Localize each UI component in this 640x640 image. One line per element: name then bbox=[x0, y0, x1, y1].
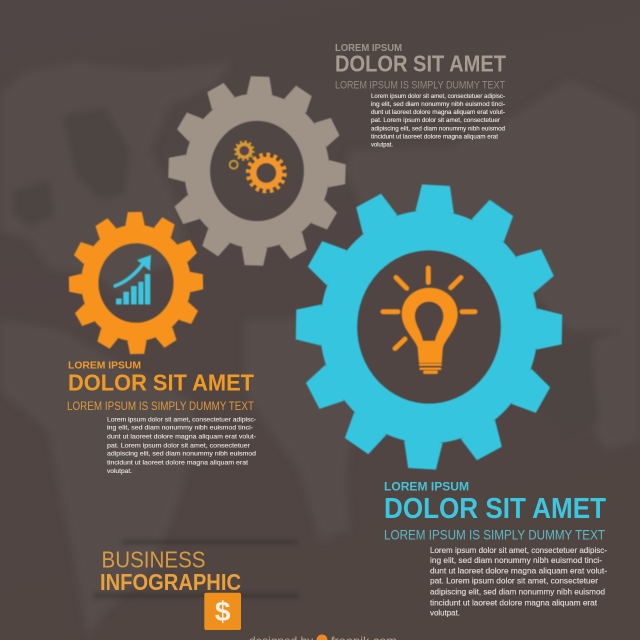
text block: orange: pat. Lorem ipsum dolor sit amet, consectetuer bbox=[107, 442, 251, 449]
text block: orange: LOREM IPSUM IS SIMPLY DUMMY TEXT bbox=[67, 401, 254, 413]
text block: blue: ing elit, sed diam nonummy nibh euismod tinci- bbox=[430, 556, 602, 565]
text block: orange: tincidunt ut laoreet dolore magna aliquam erat bbox=[107, 460, 248, 467]
text block: orange: dunt ut laoreet dolore magna aliquam erat volut- bbox=[107, 433, 256, 440]
text block: orange: DOLOR SIT AMET bbox=[68, 370, 254, 396]
icon: light bulb bbox=[383, 268, 475, 374]
gear: brown bbox=[168, 76, 346, 266]
shadow streaks bbox=[94, 540, 299, 598]
text block: blue bbox=[384, 480, 607, 617]
text block: blue: adipiscing elit, sed diam nonummy nibh euismod bbox=[430, 588, 605, 597]
text block: blue: Lorem ipsum dolor sit amet, consectetuer adipisc- bbox=[430, 546, 607, 555]
icon: dollar badge: $ bbox=[215, 596, 231, 627]
text block: orange: adipiscing elit, sed diam nonummy nibh euismod bbox=[107, 451, 256, 458]
text block: top: volutpat. bbox=[371, 141, 393, 148]
text block: top: pat. Lorem ipsum dolor sit amet, consectetuer bbox=[371, 117, 501, 124]
text block: top: adipiscing elit, sed diam nonummy nibh euismod bbox=[371, 125, 505, 132]
text block: top: ing elit, sed diam nonummy nibh euismod tinci- bbox=[371, 101, 505, 108]
text block: blue: tincidunt ut laoreet dolore magna aliquam erat bbox=[430, 598, 598, 607]
text block: orange: Lorem ipsum dolor sit amet, consectetuer adipisc- bbox=[107, 416, 256, 423]
text block: orange: LOREM IPSUM bbox=[68, 360, 141, 372]
text block: orange: ing elit, sed diam nonummy nibh euismod tinci- bbox=[107, 425, 253, 432]
text block: orange: volutpat. bbox=[107, 468, 132, 475]
icon: small gears bbox=[230, 142, 284, 191]
text block: top: DOLOR SIT AMET bbox=[335, 50, 506, 76]
text block: blue: pat. Lorem ipsum dolor sit amet, consectetuer bbox=[430, 577, 598, 586]
text block: top bbox=[335, 43, 506, 148]
text block: blue: DOLOR SIT AMET bbox=[384, 493, 606, 525]
text block: top: tincidunt ut laoreet dolore magna aliquam erat bbox=[371, 133, 498, 140]
gear: blue bbox=[296, 184, 562, 470]
gear: orange bbox=[69, 212, 203, 354]
text block: top: Lorem ipsum dolor sit amet, consectetuer adipisc- bbox=[371, 93, 505, 100]
text block: top: dunt ut laoreet dolore magna aliquam erat volut- bbox=[371, 109, 505, 116]
text block: blue: dunt ut laoreet dolore magna aliquam erat volut- bbox=[430, 566, 607, 575]
text block: orange bbox=[67, 360, 256, 475]
title: business infographic: INFOGRAPHIC bbox=[100, 569, 241, 595]
icon: growth chart bbox=[115, 255, 151, 304]
text block: top: LOREM IPSUM IS SIMPLY DUMMY TEXT bbox=[335, 80, 505, 92]
text block: top: LOREM IPSUM bbox=[335, 43, 402, 54]
footer credit bbox=[249, 634, 397, 640]
title: business infographic: BUSINESS bbox=[102, 546, 206, 572]
text block: blue: LOREM IPSUM bbox=[384, 480, 469, 494]
title: business infographic bbox=[100, 546, 241, 595]
text block: blue: volutpat. bbox=[430, 608, 460, 617]
icon: dollar badge bbox=[204, 593, 241, 630]
